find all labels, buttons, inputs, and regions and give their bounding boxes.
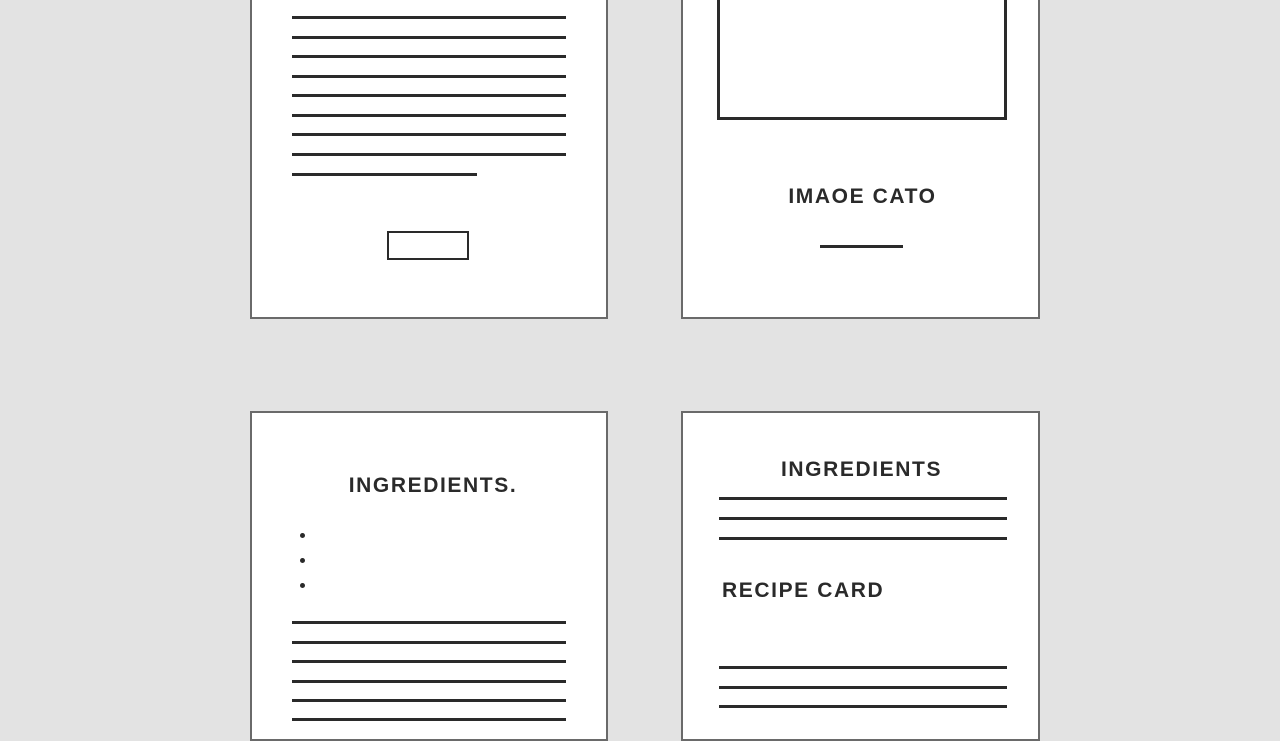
lines bottom <box>719 666 1007 708</box>
card: top-left text page <box>250 0 608 319</box>
underline <box>820 245 903 248</box>
bullets <box>300 533 305 588</box>
heading: INGREDIENTS <box>781 458 942 481</box>
card: bottom-right recipe card <box>681 411 1040 741</box>
card: bottom-left ingredients <box>250 411 608 741</box>
card: top-right image card <box>681 0 1040 319</box>
button <box>387 231 469 260</box>
image placeholder <box>717 0 1007 120</box>
lines top <box>719 497 1007 540</box>
heading: INGREDIENTS. <box>349 474 517 497</box>
caption: IMAOE CATO <box>788 185 937 208</box>
lines <box>292 621 566 721</box>
recipe card label: RECIPE CARD <box>722 579 884 602</box>
text lines <box>292 16 566 176</box>
